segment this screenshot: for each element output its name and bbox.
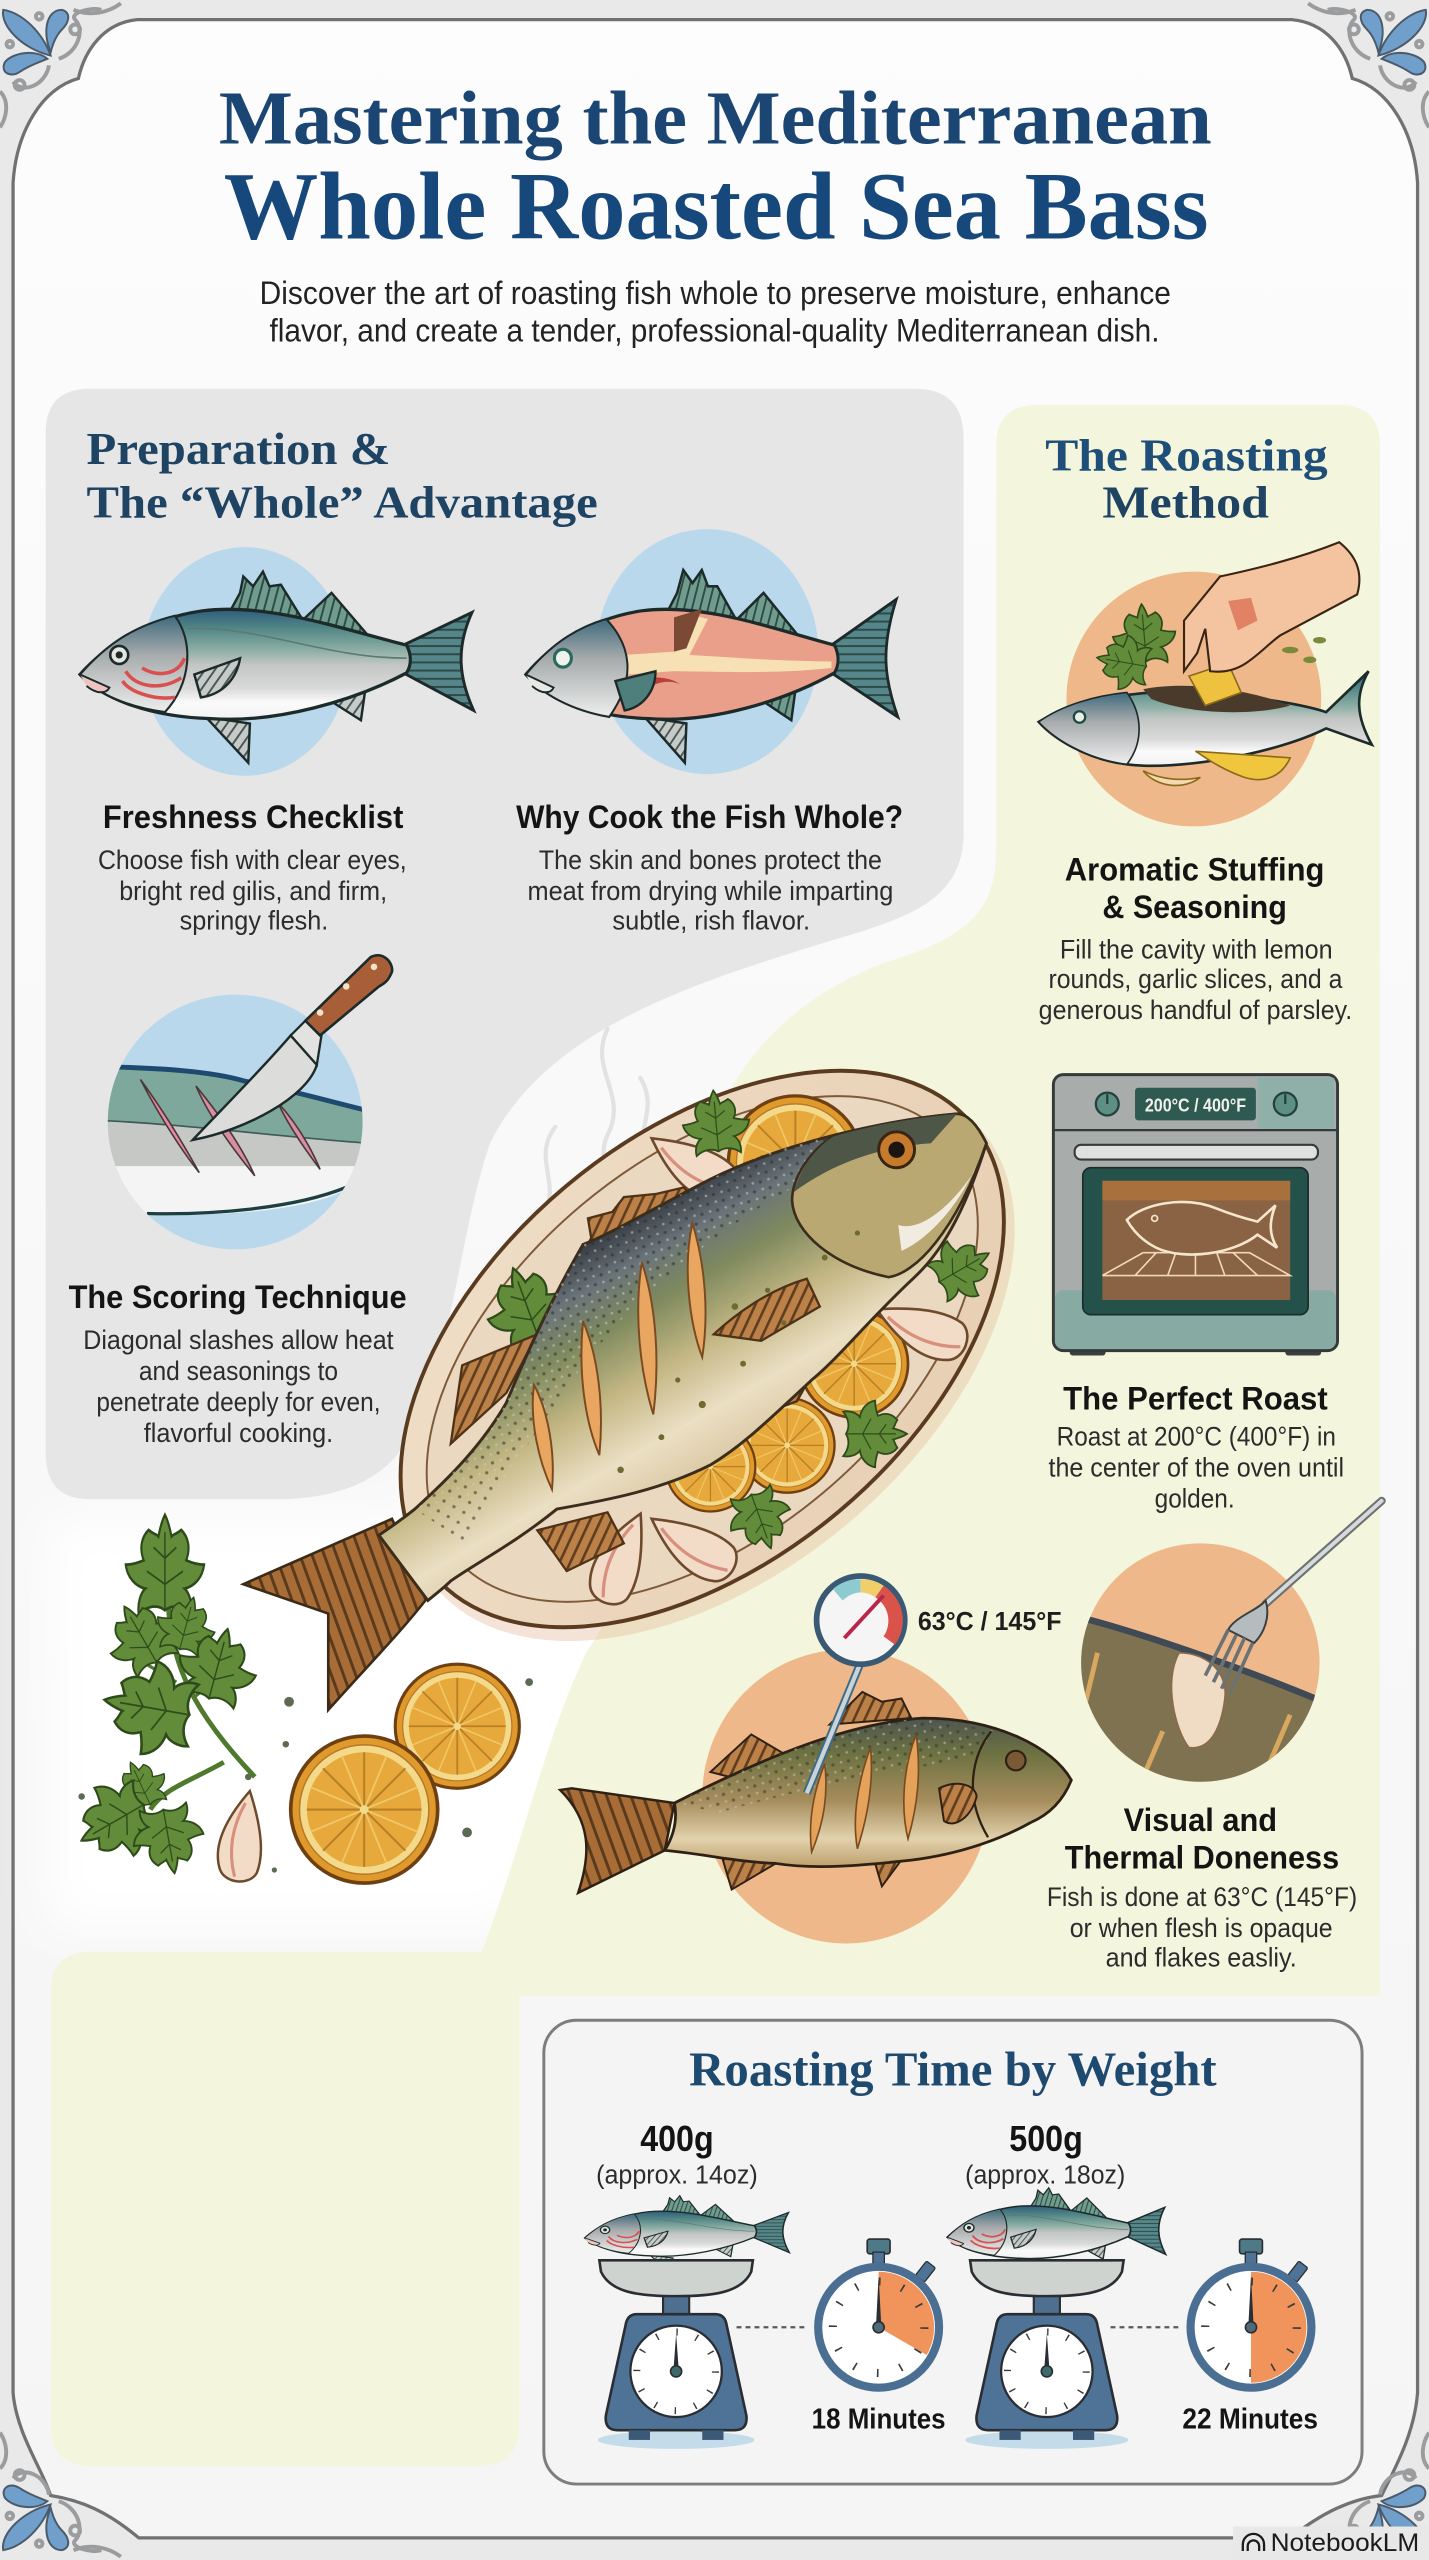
text: aromatic stuffing: generous handful of parsley. <box>1039 995 1352 1025</box>
panel: preparation background <box>46 389 964 1499</box>
icon: scale with fish 500g <box>947 2188 1166 2449</box>
icon: stopwatch 18 minutes <box>818 2239 939 2388</box>
heading: roasting time: Roasting Time by Weight <box>689 2042 1217 2097</box>
text: scoring technique: penetrate deeply for even, <box>96 1387 381 1417</box>
watermark: NotebookLM <box>1233 2526 1429 2559</box>
head <box>792 1114 986 1277</box>
icon: thermometer and roasted fish <box>560 1576 1071 1943</box>
text: scoring technique: Diagonal slashes allow heat <box>83 1325 394 1355</box>
garnish on the plate <box>474 1088 1005 1610</box>
text: aromatic stuffing <box>1039 850 1352 1025</box>
text: scoring technique: flavorful cooking. <box>144 1418 333 1448</box>
weight label 400g: (approx. 14oz) <box>596 2160 758 2190</box>
title <box>219 76 1212 259</box>
icon: scale with fish 400g <box>585 2196 789 2449</box>
label: 22 minutes: 22 Minutes <box>1182 2404 1318 2436</box>
slashes <box>533 1223 706 1489</box>
illustration: plate <box>297 961 1120 1753</box>
text: aromatic stuffing: Aromatic Stuffing <box>1065 850 1324 887</box>
label: 18 minutes: 18 Minutes <box>812 2404 946 2436</box>
dotted connector <box>1111 2326 1179 2328</box>
text: why cook the fish whole: Why Cook the Fish Whole? <box>516 798 903 835</box>
text: freshness checklist: bright red gilis, and firm, <box>119 876 387 906</box>
weight label 400g: 400g <box>640 2118 714 2159</box>
illustration: roasted sea bass <box>243 1114 986 1710</box>
text: freshness checklist: Freshness Checklist <box>103 798 403 835</box>
heading: roasting method: The Roasting <box>1045 429 1328 480</box>
label: target temperature: 63°C / 145°F <box>918 1606 1062 1636</box>
text: the perfect roast <box>1048 1379 1344 1513</box>
icon: stopwatch 22 minutes <box>1191 2239 1311 2388</box>
icon: garlic clove <box>215 1788 267 1883</box>
text: freshness checklist: springy flesh. <box>180 905 328 935</box>
icon: oven <box>1053 1075 1338 1356</box>
icon: parsley sprigs <box>62 1515 266 1879</box>
icon: stuffing the fish <box>1039 542 1372 826</box>
text: scoring technique <box>69 1278 407 1448</box>
pectoral fin <box>714 1279 820 1341</box>
heading: preparation <box>87 423 598 528</box>
watermark: NotebookLM: NotebookLM <box>1271 2529 1419 2557</box>
corner ornament: bottom left <box>0 2433 121 2557</box>
subtitle: Discover the art of roasting fish whole to preserve moisture, enhance <box>260 274 1171 311</box>
heading: roasting method <box>1045 429 1328 528</box>
icon: fresh fish <box>80 547 474 776</box>
text: freshness checklist <box>98 798 407 935</box>
tail <box>243 1519 428 1710</box>
seasoning <box>617 1230 860 1473</box>
title: Mastering the Mediterranean <box>219 76 1212 161</box>
weight label 500g <box>965 2118 1125 2190</box>
heading: roasting method: Method <box>1102 477 1269 528</box>
weight label 500g: (approx. 18oz) <box>965 2160 1125 2190</box>
text: why cook the fish whole: The skin and bones protect the <box>539 845 882 875</box>
icon: fork flaking fish <box>1078 1501 1382 1788</box>
thermometer <box>807 1576 905 1793</box>
oven display: 200°C / 400°F <box>1145 1094 1246 1115</box>
weight label 500g: 500g <box>1009 2118 1083 2159</box>
panel: roasting time by weight <box>544 2020 1362 2484</box>
text: visual and thermal doneness <box>1047 1801 1357 1972</box>
text: why cook the fish whole: meat from drying while imparting <box>528 876 893 906</box>
heading: preparation: The “Whole” Advantage <box>87 477 598 528</box>
eye <box>879 1132 915 1168</box>
text: visual and thermal doneness: and flakes easliy. <box>1106 1942 1297 1972</box>
text: aromatic stuffing: & Seasoning <box>1102 888 1287 925</box>
text: visual and thermal doneness: Thermal Doneness <box>1065 1838 1339 1875</box>
fins <box>451 1187 821 1571</box>
panel: roasting method background <box>51 405 1380 2466</box>
text: scoring technique: and seasonings to <box>139 1356 338 1386</box>
oven display <box>1135 1088 1256 1120</box>
text: the perfect roast: the center of the oven until <box>1048 1452 1344 1482</box>
weight label 400g <box>596 2118 758 2190</box>
text: the perfect roast: Roast at 200°C (400°F) in <box>1057 1421 1336 1451</box>
subtitle: flavor, and create a tender, professional-quality Mediterranean dish. <box>269 311 1160 348</box>
body <box>379 1114 986 1601</box>
text: visual and thermal doneness: or when flesh is opaque <box>1070 1913 1333 1943</box>
heading: preparation: Preparation & <box>87 423 390 474</box>
text: why cook the fish whole: subtle, rish flavor. <box>612 905 810 935</box>
text: visual and thermal doneness: Fish is done at 63°C (145°F) <box>1047 1882 1357 1912</box>
scale texture <box>415 1133 833 1543</box>
icon: lemon slices <box>291 1664 519 1883</box>
text: scoring technique: The Scoring Technique <box>69 1278 407 1315</box>
text: freshness checklist: Choose fish with clear eyes, <box>98 845 407 875</box>
text: the perfect roast: The Perfect Roast <box>1063 1379 1328 1416</box>
white wash behind the garnish <box>49 1307 686 1927</box>
icon: cutaway fish <box>526 529 898 774</box>
icon: scoring knife <box>98 955 392 1249</box>
corner ornament: top right <box>1308 3 1429 127</box>
text: aromatic stuffing: Fill the cavity with lemon <box>1060 935 1333 965</box>
corner ornament: bottom right <box>1308 2433 1429 2557</box>
title: Whole Roasted Sea Bass <box>224 152 1209 259</box>
corner ornament: top left <box>0 3 121 127</box>
dotted connector <box>737 2326 808 2328</box>
text: the perfect roast: golden. <box>1155 1483 1235 1513</box>
text: why cook the fish whole <box>516 798 903 935</box>
text: visual and thermal doneness: Visual and <box>1124 1801 1277 1838</box>
icon: steam wisps <box>542 1029 648 1217</box>
text: aromatic stuffing: rounds, garlic slices, and a <box>1048 964 1342 994</box>
subtitle <box>260 274 1171 348</box>
herb flecks <box>78 1678 533 1873</box>
